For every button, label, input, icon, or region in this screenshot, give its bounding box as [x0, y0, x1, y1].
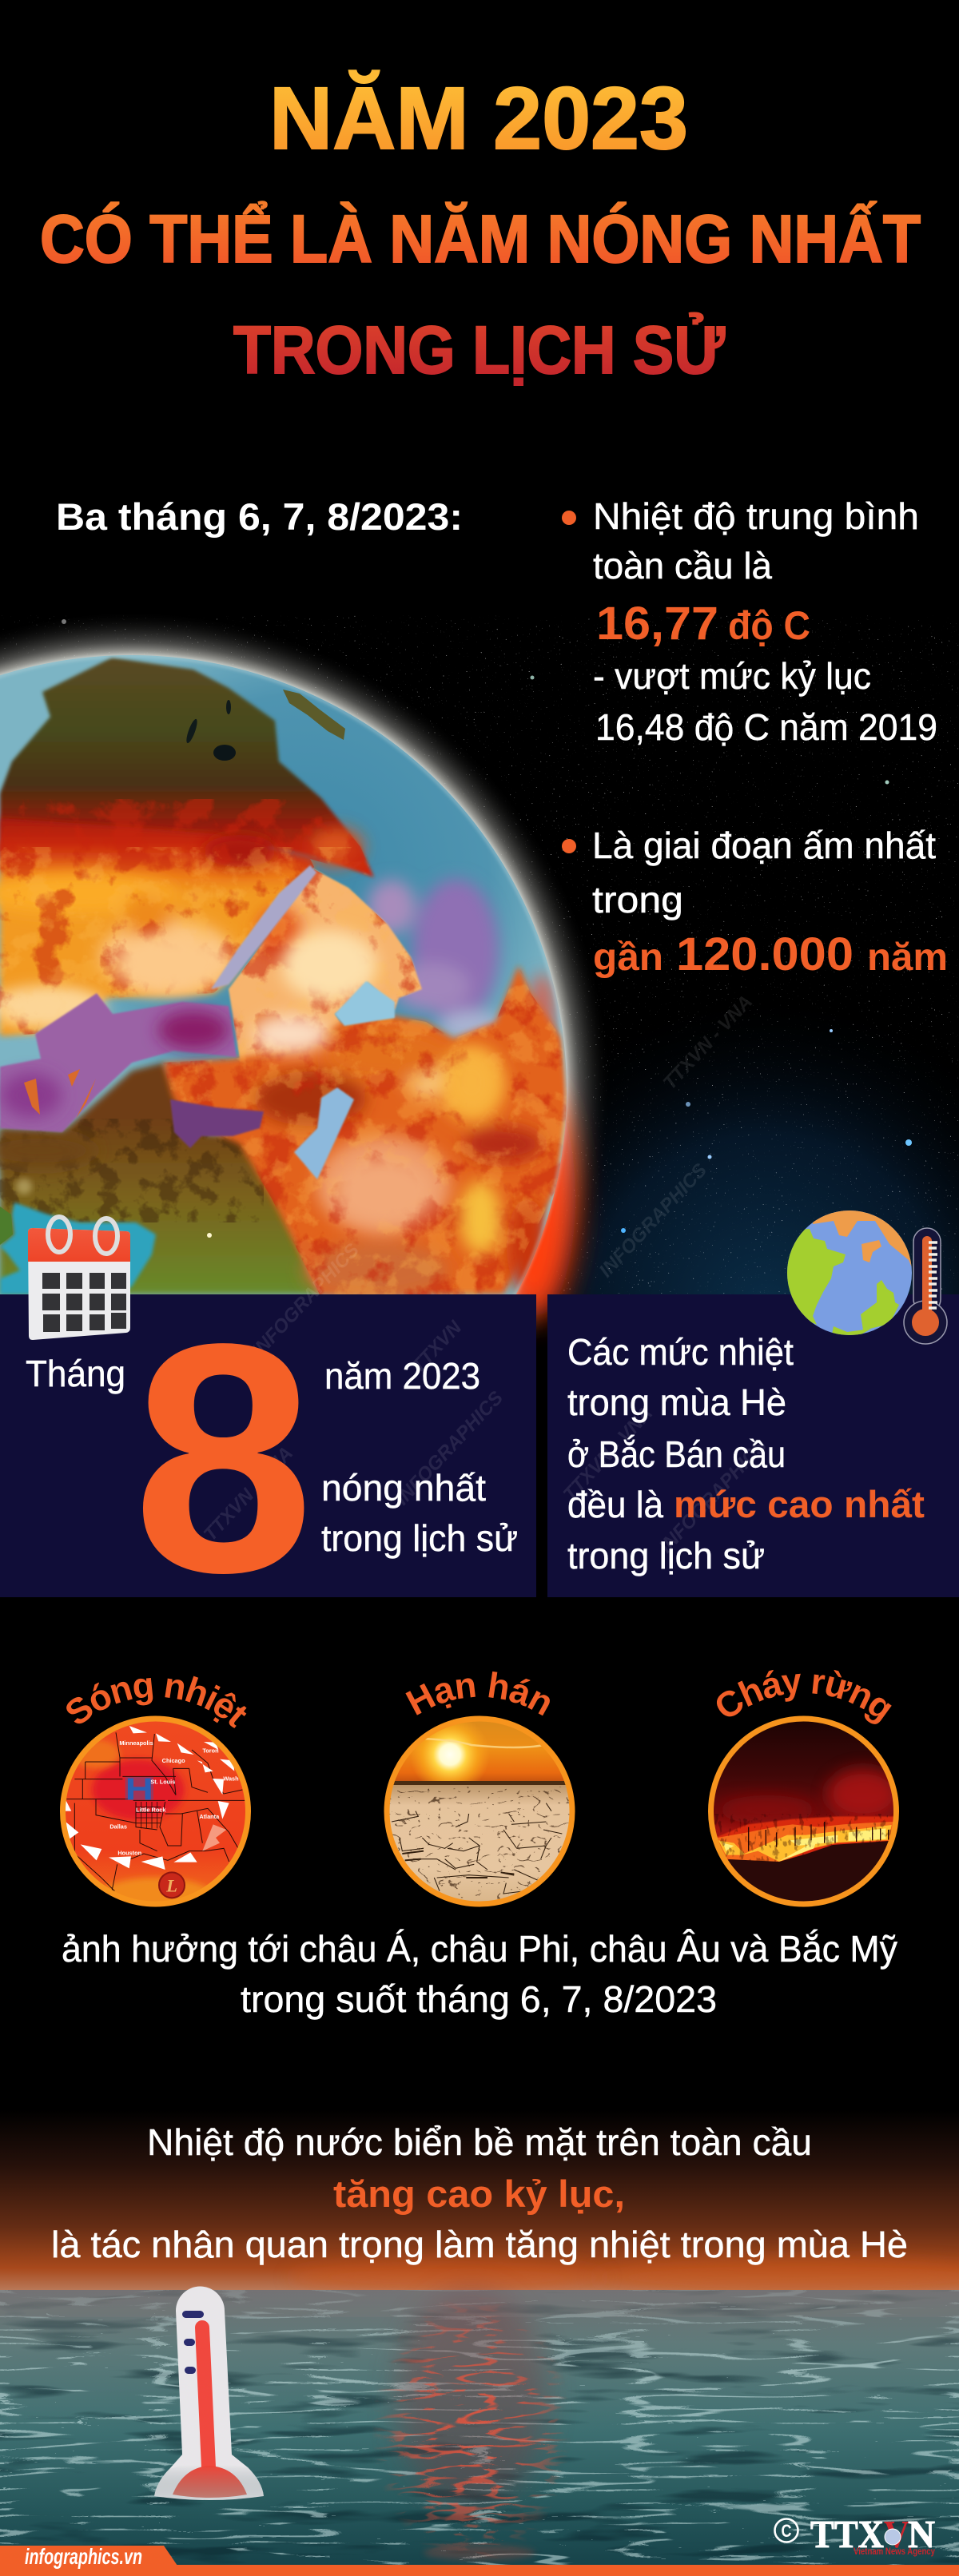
- heading: Ba tháng: Ba tháng 6, 7, 8/2023:: [56, 495, 463, 538]
- label: năm 2023: năm 2023: [324, 1355, 480, 1397]
- heat map of the USA: Dallas: [109, 1823, 127, 1830]
- panel watermarks: TTXVN: [408, 1317, 466, 1377]
- label: Tháng: Tháng: [26, 1353, 125, 1394]
- panel: August 2023: [0, 1239, 536, 1640]
- Caspian Sea: [294, 1087, 354, 1179]
- heat map of the USA: Atlanta: [199, 1813, 220, 1820]
- bottom-left sea: [0, 1203, 156, 1294]
- logo: TTXVN: V: [884, 2512, 909, 2556]
- bullet: warmest period: năm: [867, 936, 948, 979]
- panel watermarks: [200, 1239, 507, 1545]
- panel text: ở Bắc Bán cầu: [567, 1433, 786, 1475]
- Iran belt and Asia: [163, 965, 569, 1294]
- title: TRONG LỊCH SỬ: [233, 312, 725, 388]
- big number 8: 8: [133, 1277, 314, 1640]
- bullet: warmest period: [562, 825, 948, 980]
- label: nóng nhất trong lịch sử: nóng nhất: [321, 1467, 486, 1509]
- panel text: đều là: [567, 1484, 663, 1525]
- circle: drought: [384, 1672, 575, 1906]
- hot zone: [0, 818, 314, 1036]
- bullet: warmest period: Là giai đoạn ấm nhất: [592, 825, 936, 866]
- hot sky over the sea: [0, 2109, 959, 2296]
- text: affected regions: trong suốt tháng 6, 7, 8/2023: [241, 1978, 717, 2020]
- logo: TTXVN: N: [908, 2512, 935, 2556]
- panel: northern hemisphere summer: [547, 1294, 959, 1597]
- title: NĂM 2023: [269, 70, 688, 168]
- heat map of the USA: L: [165, 1875, 177, 1895]
- Arabia: [229, 869, 422, 1063]
- lavender ocean: [368, 879, 555, 1056]
- panel watermarks: INFOGRAPHICS: [248, 1239, 364, 1362]
- heat map of the USA: Toron: [202, 1747, 219, 1755]
- red glow lower right: [492, 1079, 575, 1318]
- starry space background: [0, 615, 959, 1294]
- heat map of the USA: Chicago: [162, 1757, 185, 1764]
- island: [283, 690, 345, 740]
- bullet: global mean temperature: Nhiệt độ trung bình: [593, 495, 919, 537]
- bullet: global mean temperature: độ C: [728, 603, 810, 648]
- globe with heat map: [0, 620, 604, 1341]
- Africa landmass: [0, 658, 374, 877]
- text: affected regions: [62, 1928, 897, 2020]
- heat map of the USA: St. Louis: [150, 1778, 175, 1785]
- panel text: mức cao nhất: [674, 1483, 925, 1525]
- panel text: [567, 1331, 925, 1576]
- panel watermarks: TTXVN - VNA: [559, 1402, 657, 1505]
- logo: TTXVN: C: [782, 2521, 792, 2541]
- circle: heat wave: [60, 1676, 251, 1906]
- icon: earth and thermometer: [783, 1207, 947, 1344]
- bullet: global mean temperature: 16,48 độ C năm 2019: [595, 706, 937, 748]
- text: sea surface temperature: là tác nhân quan trọng làm tăng nhiệt trong mùa Hè: [51, 2224, 908, 2265]
- bullet: warmest period: trong: [592, 879, 683, 920]
- globe atmosphere glow: [0, 611, 611, 1570]
- bullet: warmest period: 120.000: [676, 928, 854, 980]
- heat map of the USA: Houston: [117, 1850, 142, 1857]
- heat map of the USA: [66, 1721, 245, 1902]
- text: sea surface temperature: Nhiệt độ nước biển bề mặt trên toàn cầu: [147, 2121, 812, 2163]
- ring: [62, 1719, 248, 1904]
- heat map of the USA: Little Rock: [136, 1807, 166, 1814]
- Mediterranean: [0, 993, 237, 1132]
- bullet: global mean temperature: - vượt mức kỷ lục: [593, 655, 871, 697]
- globe inner rim: [0, 656, 566, 1525]
- text: affected regions: ảnh hưởng tới châu Á, châu Phi, châu Âu và Bắc Mỹ: [62, 1928, 897, 1970]
- panel watermarks: INFOGRAPHICS: [392, 1387, 507, 1509]
- watermark on space: [595, 991, 757, 1282]
- Persian Gulf: [335, 981, 395, 1026]
- sea with red reflection: [0, 2289, 959, 2566]
- Black Sea: [170, 1099, 264, 1148]
- logo: TTXVN: TTX: [810, 2512, 884, 2556]
- cream and yellow highlights over the mottling: [0, 930, 501, 1254]
- icon: calendar: [28, 1217, 130, 1340]
- label: Cháy rừng: Cháy rừng: [716, 1670, 892, 1724]
- panel watermarks: [559, 1402, 771, 1557]
- Red Sea: [211, 865, 316, 989]
- logo: TTXVN: Vietnam News Agency: [854, 2547, 936, 2557]
- panel watermarks: TTXVN - VNA: [200, 1442, 297, 1545]
- label: nóng nhất trong lịch sử: trong lịch sử: [321, 1517, 518, 1559]
- globe surface: [0, 639, 575, 1302]
- panel text: trong lịch sử: [567, 1535, 765, 1576]
- forest fire photo: [714, 1721, 893, 1902]
- bottom bar and website tab: [0, 2544, 959, 2576]
- bottom bar and website tab: infographics.vn: [25, 2544, 142, 2569]
- bullet: global mean temperature: toàn cầu là: [593, 545, 772, 586]
- heat mottling on land only: [0, 799, 575, 1294]
- bullet: global mean temperature: 16,77: [596, 598, 718, 650]
- panel text: trong mùa Hè: [567, 1381, 786, 1423]
- text: sea surface temperature: tăng cao kỷ lục,: [333, 2173, 625, 2215]
- ring: [711, 1719, 897, 1904]
- circle: wildfire: [708, 1670, 899, 1906]
- bullet: warmest period: gần: [593, 936, 663, 979]
- label: Sóng nhiệt: Sóng nhiệt: [66, 1676, 246, 1728]
- lower-left olive land: [0, 1063, 320, 1294]
- icon: thermometer in the sea: [154, 2287, 264, 2500]
- heat map of the USA: Wash: [223, 1775, 239, 1783]
- watermark on space: INFOGRAPHICS: [595, 1159, 711, 1282]
- heat map of the USA: Minneapolis: [119, 1739, 153, 1747]
- ring: [387, 1719, 572, 1904]
- heat map of the USA: H: [125, 1772, 153, 1807]
- cracked earth photo: [390, 1721, 569, 1902]
- logo: TTXVN: [775, 2512, 936, 2557]
- title: [40, 70, 921, 388]
- text: sea surface temperature: [51, 2121, 908, 2265]
- panel watermarks: INFOGRAPHICS: [655, 1435, 771, 1557]
- bullet: global mean temperature: [562, 495, 937, 748]
- panel text: Các mức nhiệt: [567, 1331, 794, 1373]
- watermark on space: TTXVN - VNA: [659, 991, 757, 1094]
- label: nóng nhất trong lịch sử: [321, 1467, 518, 1559]
- label: Hạn hán: Hạn hán: [406, 1672, 550, 1716]
